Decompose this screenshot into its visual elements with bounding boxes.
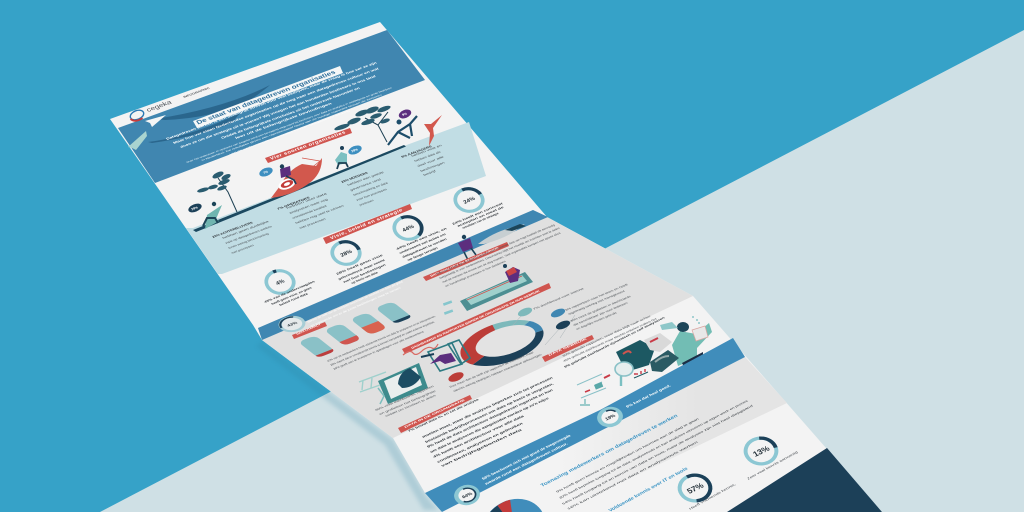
- column: achterblijvers: visie op datagedreven werken: [224, 224, 273, 245]
- header: logo: cegeka: [145, 99, 174, 114]
- text lines: right: 9% gebruikt dashboards dynamisch en zelf analyseren: [563, 316, 666, 369]
- column: aanjagers: hebben visie en: [410, 143, 443, 158]
- title: [193, 66, 343, 128]
- column: moeders: voor hun processen: [355, 187, 388, 202]
- sheet shadow: [256, 342, 438, 510]
- ring: 28%: 28%: [340, 249, 354, 259]
- text left of donut: Voor meer dan de helft zijn rapporten de standaard, maar: [448, 351, 535, 389]
- column: moeders: benchmarking en data: [352, 181, 389, 197]
- text: toenazing lines: 30% heeft beperkte toegang tot de data, analysetools en kan analyses uitvoeren op eigen werk en proces: [558, 399, 749, 500]
- text under 4%: 43% van de ondervraagden: [263, 280, 316, 304]
- text left of donut: slechts weinig bedrijven hebben interactieve oplossingen: [452, 353, 543, 393]
- ring in band: [276, 314, 308, 334]
- text under 24%: resultaten van de strategie: [461, 211, 500, 230]
- column: achterblijvers: hebben geen duidelijke: [221, 219, 270, 240]
- illustration: wave and purple person in frame: [403, 340, 470, 371]
- text: toenazing lines: 9% heeft geen kennis en mogelijkheden om hiermee aan de slag te gaan: [555, 417, 700, 494]
- bullets: lower left: 9% heeft de data architectuur datagedreven ingericht en kan: [426, 388, 554, 449]
- badge: purple 9%: [398, 110, 412, 118]
- red label: upper right: DATA KWALITEIT EN BESCHIKBAARHEID: [430, 246, 500, 278]
- ring: 19%: 19%: [604, 413, 617, 422]
- ring: 57%: 57%: [685, 481, 705, 496]
- column: operators: onvoldoende kwaliteit: [291, 204, 328, 220]
- paragraph: upper right: met de mensen die ermee aan de slag moeten. Veel organisaties kampen met aparte silo's: [441, 231, 562, 284]
- text under 4%: beleid rond data: [278, 292, 309, 307]
- badge: 29% middle: 29%: [350, 148, 359, 153]
- bar 1: [298, 335, 335, 358]
- column: achterblijvers: met processen: [230, 243, 255, 255]
- red label: long: DASHBOARDS EN RAPPORTEN BINNEN DE ORGANISATIE EN HUN GEBRUIK: [411, 289, 541, 350]
- text near donut badges: 9% rapporteert naar het team en heeft: [564, 283, 629, 312]
- bar 2: [324, 323, 361, 346]
- column: operators: met processen: [298, 217, 327, 230]
- dark navy footer: [727, 448, 882, 512]
- illustration: running person: [388, 116, 417, 145]
- column: aanjagers: hebben data als: [413, 150, 442, 163]
- badge: 7%: [259, 168, 273, 176]
- column: aanjagers: [400, 143, 446, 177]
- intro small print: in Nederland. De resultaten geven een representatief beeld van de huidige maturiteit binnen de sectoren: [201, 93, 384, 162]
- text under 28%: 28% heeft geen visie: [335, 253, 384, 276]
- bullets: lower left: combineren, analyseren en gebruiken: [436, 422, 524, 464]
- illustration: laptop with person: [460, 264, 533, 311]
- illustration: tablet and navy person: [359, 363, 428, 404]
- pie chart: [473, 489, 555, 512]
- text under 57%: Heeft voldoende kennis,: [688, 483, 737, 511]
- illustration: tree left: [197, 170, 237, 212]
- text under 24%: [451, 202, 505, 230]
- intro text: Ontdek de belangrijkste conclusies uit het onderzoek hieronder en: [220, 86, 361, 140]
- intro text: Datagedreven werken is een belangrijk streven voor veel bedrijven, maar de vraag is hoe ver ze zijn: [165, 61, 378, 141]
- text under 44%: datagedreven te worden: [401, 237, 448, 259]
- bars text: 28% meent dat er onvoldoende kennis is binnen het bedrijf en zoekt externe expertise,: [329, 320, 436, 367]
- gray data panel: [258, 210, 693, 438]
- heading: visie, beleid en strategie: [323, 204, 412, 244]
- dark blue plane trails: [148, 85, 270, 143]
- ground line: [193, 145, 406, 232]
- heading: toenazing medewerkers: Toenazing medewerkers om datagedreven te werken: [540, 413, 679, 488]
- ring: 4%: [264, 269, 296, 295]
- chips: small legend: [443, 300, 453, 315]
- text lines: right: 30% gebruikt rapporten, maar data blijft vaak achter: [561, 314, 652, 358]
- blue band: lower: [425, 338, 745, 512]
- text under 28%: geformuleerd, maar neemt: [337, 258, 386, 281]
- bullets: lower left: om data te analyseren die aangeboden worden op zo'n wijze: [429, 397, 550, 454]
- column: operators: [276, 192, 345, 230]
- bar 4: [375, 301, 412, 324]
- column: operators: analyseren maar nog: [288, 197, 329, 215]
- ring: 64%: 64%: [461, 491, 474, 500]
- ring in band: 43%: [286, 321, 298, 327]
- badge: 29%: 29%: [190, 206, 199, 211]
- illustration: analyst with puzzle panels: [615, 316, 712, 386]
- text near donut badges: en dagelijks worden gebruikt: [575, 311, 618, 331]
- text under 44%: 44% heeft een visie, en: [395, 227, 448, 251]
- column: moeders: hebben een goede: [346, 170, 385, 187]
- column: operators: hebben veel data: [285, 192, 328, 210]
- band text lower: waarde rond een datagedreven cultuur.: [483, 442, 569, 486]
- ring: 24%: [453, 187, 485, 213]
- badge: 7%: 7%: [262, 170, 269, 175]
- badges around donut: [447, 306, 575, 384]
- badge: purple 9%: 9%: [401, 112, 408, 117]
- red label: right: DATA GEBRUIK: [548, 336, 589, 357]
- badge: 29% middle: [348, 146, 362, 154]
- bullets: lower left: moeten moet, maar die analyses beperken zich tot processen: [421, 376, 554, 439]
- bullets: lower left: bestaande bedrijfsprocessen om data op basis te vergroten.: [424, 382, 555, 444]
- ring: 13%: 13%: [751, 444, 771, 459]
- band text lower: 58% beschouwt zich niet goed de toegevoegde: [481, 434, 572, 481]
- icon: paper plane: [145, 115, 166, 127]
- text under 44%: [395, 227, 448, 262]
- donut: hole: [472, 319, 539, 363]
- text under 44%: op lange termijn: [406, 246, 439, 262]
- red label: lower left: [398, 395, 472, 433]
- red label: data literacy: [292, 322, 327, 339]
- text under 24%: actieplan en meet de: [456, 205, 505, 228]
- ring: 28%: [330, 240, 362, 266]
- red label: upper right: [423, 242, 509, 281]
- column: moeders: processen: [358, 198, 375, 207]
- illustration: purple person and plane: [458, 224, 526, 260]
- heading: vier soorten organisaties: Vier soorten organisaties: [269, 130, 347, 161]
- bars text: 43% van de medewerkers heeft voldoende kennis om data te analyseren en te interpreteren,: [326, 314, 437, 363]
- donut: segments: [478, 327, 526, 359]
- text near donut badges: regelmatig overleg met management: [567, 289, 626, 316]
- illustration: red person: [424, 115, 442, 146]
- red label: data literacy: DATA LITERACY: [296, 323, 322, 336]
- donut chart: [472, 319, 539, 363]
- ring: 13%: [733, 428, 789, 474]
- ring: 44%: [392, 215, 424, 241]
- intro small print: Over het onderzoek: In opdracht van Cegeka werd een bevraging uitgevoerd bij beslissers over data en analytics in middelgrote en grote bedrijven: [186, 86, 394, 164]
- ring: 4%: 4%: [275, 279, 286, 287]
- text near donut badges: [532, 283, 632, 331]
- illustration: red snail: [271, 158, 322, 198]
- text under 28%: op basis van data: [350, 271, 379, 285]
- ring: 64%: [452, 483, 482, 507]
- column: aanjagers: bedrijf: [422, 169, 437, 177]
- text near donut badges: die beschikbaar zijn voor iedereen: [572, 301, 629, 327]
- band text: Slechts de helft van de bedrijven beschouwt de kwaliteit van data als goed: [306, 280, 404, 324]
- illustration: person left: [203, 202, 222, 229]
- illustration: person with rope: [335, 146, 348, 169]
- ring: 19%: [596, 405, 624, 429]
- blue band: upper: [258, 210, 548, 340]
- text under 28%: [335, 253, 387, 285]
- folded infographic sheet: [110, 22, 882, 512]
- column: achterblijvers: 29% ACHTERBLIJVERS: [211, 221, 254, 239]
- bar chart: four pill bars: [298, 301, 412, 358]
- paragraph: upper right: Meer dan de helft van de bedrijven beschikt over voldoende data van hoge kwaliteit die eenvoudig: [435, 223, 556, 276]
- column: aanjagers: 9% AANJAGERS: [400, 145, 433, 159]
- text lines: right: [561, 314, 666, 369]
- band text: 9%: 9% kan dat heel goed.: [625, 384, 672, 409]
- illustration: small dashboard: [577, 374, 610, 405]
- bullets: lower left: 7% bouwt data in, en zet die analyse: [407, 397, 480, 433]
- illustration: person on snail: [280, 164, 296, 184]
- text under 44%: onderneemt wel acties om: [398, 232, 447, 255]
- text near donut badges: 7% dashboard voor interne: [532, 287, 585, 311]
- red label: right: [542, 335, 594, 362]
- text: toenazing lines: [555, 399, 754, 511]
- text left of donut: en grafieken het belangrijkste: [378, 389, 437, 416]
- bullets: lower left: van bedrijfsgebonden data: [440, 428, 523, 468]
- intro text: Maar hoe ver staan Nederlandse organisaties op de weg naar een datagedreven cultuur en wat: [172, 66, 381, 145]
- bullets: lower left: 4% heeft een architectuur voor alle data: [432, 414, 525, 459]
- intro text: [165, 61, 381, 149]
- column: achterblijvers: [211, 219, 273, 255]
- column: moeders: governance rond: [349, 177, 382, 192]
- ring: 44%: 44%: [402, 224, 416, 234]
- sheet base: [110, 22, 882, 512]
- column: aanjagers: beslissingen: [419, 161, 446, 173]
- text under 28%: wel hun beslissingen: [341, 263, 387, 284]
- header panel: blue: [118, 30, 425, 183]
- header: logo: [130, 101, 172, 122]
- illustration: tree right: [334, 104, 391, 142]
- band text: en voldoende om er de juiste beslissingen mee te nemen: [309, 286, 402, 328]
- text under 4%: heeft geen visie, en geen: [270, 286, 313, 306]
- text: toenazing lines: 16% kan uitstekend met data en analysetools werken: [566, 440, 699, 511]
- title: De staat van datagedreven organisaties: [195, 69, 338, 126]
- text under 24%: 24% heeft een concreet: [451, 202, 504, 226]
- ring: 24%: 24%: [463, 196, 477, 206]
- lower gray stripe: [442, 357, 787, 512]
- column: operators: 7% OPERATORS: [276, 196, 311, 211]
- text under 13%: Zeer veel kennis aanwezig: [746, 450, 799, 481]
- column: operators: hebben nog veel te winnen: [294, 204, 345, 225]
- bar 3: [350, 312, 387, 335]
- text left of donut: middel om inzichten te delen: [384, 394, 437, 418]
- header: category label: INFOGRAPHIC: [182, 86, 211, 99]
- text lines: right: 45% gebruikt dashboards maar slechts enkelen maken het: [562, 317, 658, 363]
- text left of donut: 60% vindt dashboards, rapporten: [374, 384, 435, 412]
- red label: long: [402, 283, 551, 354]
- ring: 57%: [674, 470, 716, 506]
- heading: vier soorten organisaties: [265, 128, 352, 163]
- text under 4%: [264, 281, 315, 306]
- column: achterblijvers: tonen weinig benchmarking: [227, 232, 270, 250]
- column: moeders: [340, 170, 389, 207]
- bullets: lower left: [407, 376, 555, 468]
- text: toenazing lines: 54% heeft toegang tot en kennis van data en tools, maar de analyses zijn niet heel diepgaand: [561, 404, 754, 506]
- text near donut badges: 30% toont de grafieken in dashboards: [569, 294, 632, 323]
- red label: lower left: DATA IN DE ORGANISATIE: [404, 398, 466, 429]
- paragraph: upper right: toegankelijk is voor medewerkers. Desondanks blijft het moeilijk om inzichten snel te delen: [438, 226, 561, 280]
- heading: visie, beleid en strategie: Visie, beleid en strategie: [329, 207, 404, 240]
- icon: hand: [128, 131, 147, 150]
- intro small print: van de ondervraagde organisaties en hun datagedreven werking: [229, 109, 352, 156]
- light blue organisation panel: [186, 122, 486, 274]
- paragraph: upper right: en handmatige processen in hun dataketen: [444, 259, 507, 288]
- column: aanjagers: doel voor alle: [416, 155, 445, 168]
- column: moeders: 29% MOEDERS: [340, 171, 369, 184]
- intro text: doen ze om die strategie uit te voeren? Wij vroegen het aan honderden beslissers in ons land: [179, 74, 377, 149]
- bars text: 20% geeft aan te investeren in opleidingen voor alle medewerkers: [332, 330, 425, 371]
- intro small print: [186, 86, 394, 164]
- badge: 29%: [188, 204, 202, 212]
- intro text: leer uit de belangrijkste bevindingen: [234, 102, 333, 140]
- text left of donut: [374, 351, 543, 418]
